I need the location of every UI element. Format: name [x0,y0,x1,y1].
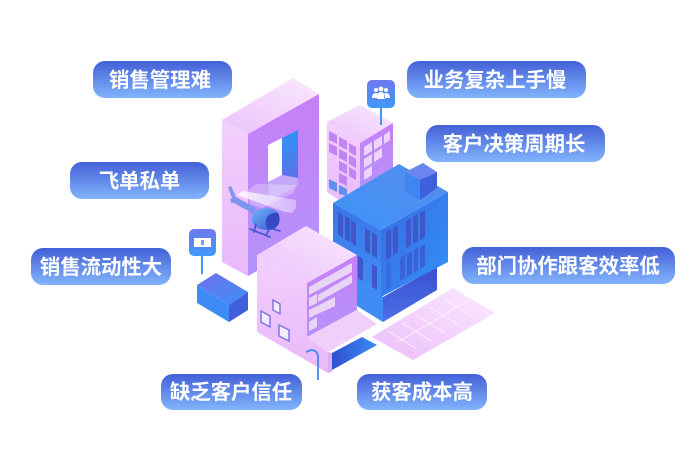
pink building with canopy [257,226,377,373]
label: 获客成本高 [357,374,487,410]
label: 飞单私单 [70,162,209,199]
label: 客户决策周期长: 客户决策周期长 [443,132,585,156]
tall building with window [222,78,319,276]
label: 飞单私单: 飞单私单 [99,170,180,193]
illustration: isometric city [189,78,495,380]
icon: street lamp [306,350,318,380]
label: 部门协作跟客效率低: 部门协作跟客效率低 [476,254,660,278]
label: 缺乏客户信任: 缺乏客户信任 [170,380,292,404]
icon: money sign [189,229,216,274]
label: 销售管理难: 销售管理难 [109,69,211,92]
small building [327,105,393,214]
label: 业务复杂上手慢 [407,61,586,98]
label: 客户决策周期长 [426,125,605,162]
label: 销售管理难 [93,61,232,98]
plaza [372,288,495,360]
label: 销售流动性大 [31,248,171,285]
label: 销售流动性大: 销售流动性大 [40,256,162,279]
blue box [197,273,248,322]
label: 部门协作跟客效率低 [462,247,675,284]
blue building [333,163,448,322]
label: 获客成本高: 获客成本高 [371,380,473,404]
icon: people sign [367,80,395,125]
label: 业务复杂上手慢: 业务复杂上手慢 [424,69,566,92]
label: 缺乏客户信任 [161,374,302,410]
helicopter [228,184,296,237]
